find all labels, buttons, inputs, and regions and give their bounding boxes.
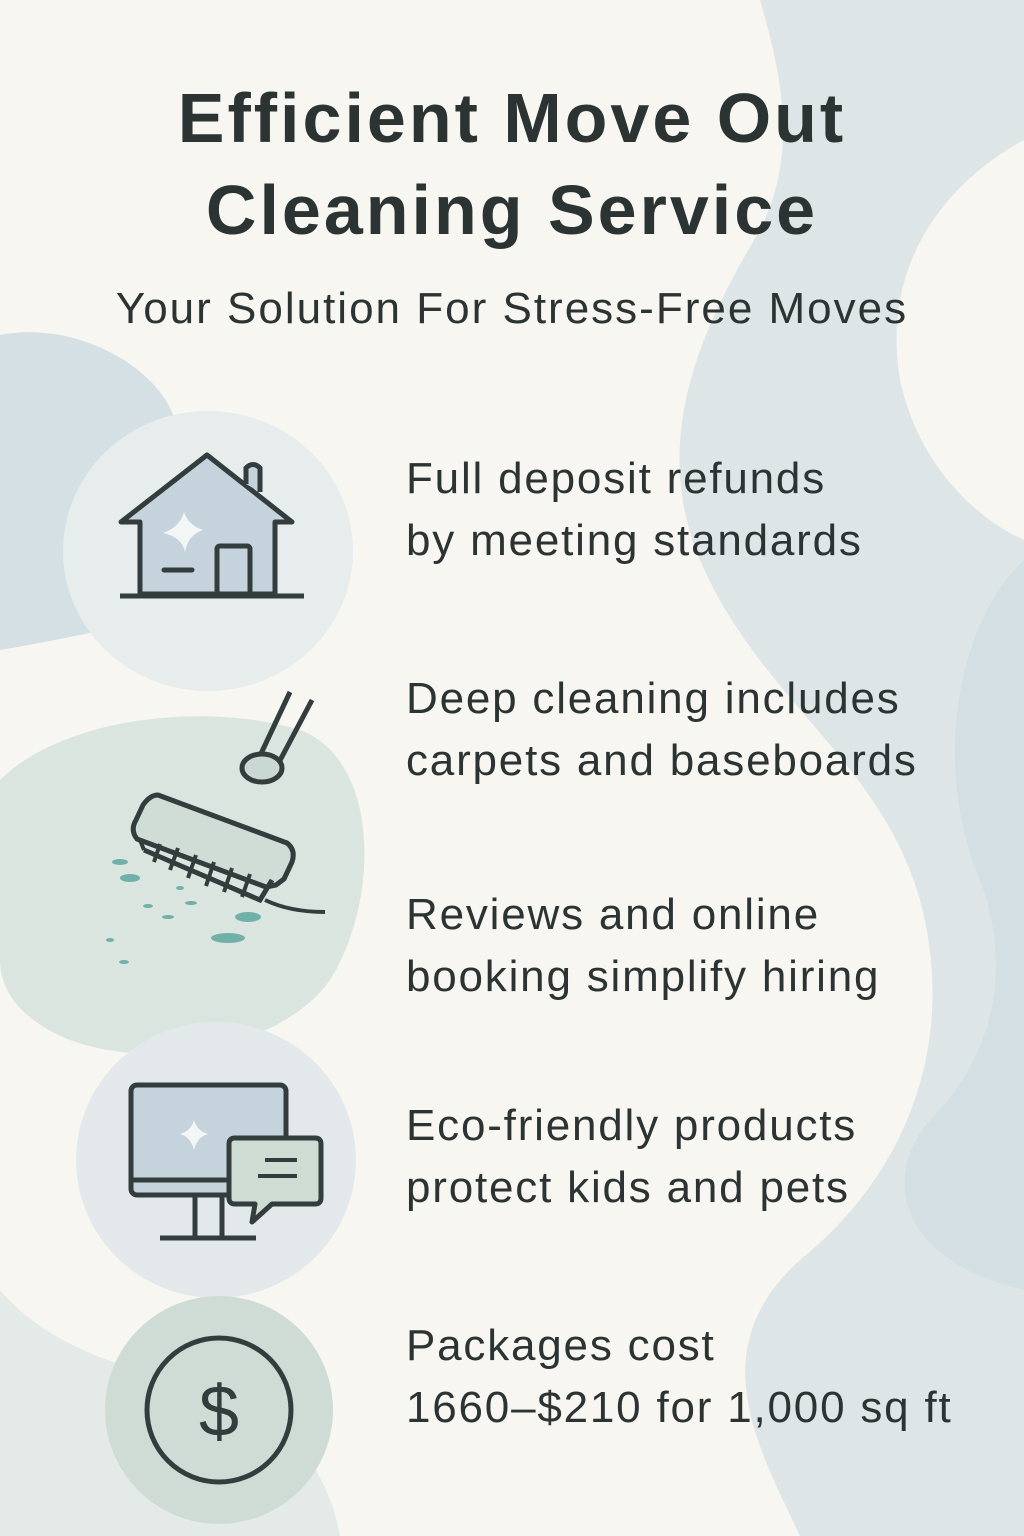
icon: house [63, 411, 353, 691]
text: deposit: by meeting standards [406, 516, 863, 565]
text: deposit [406, 454, 863, 565]
text: eco-friendly: Eco-friendly products [406, 1101, 857, 1150]
text: reviews: booking simplify hiring [406, 952, 880, 1001]
text: deep cleaning: Deep cleaning includes [406, 674, 901, 723]
subtitle: Your Solution For Stress-Free Moves [116, 284, 908, 333]
title: Efficient Move Out [178, 79, 846, 157]
text: packages: Packages cost [406, 1321, 716, 1370]
text: packages: 1660–$210 for 1,000 sq ft [406, 1383, 953, 1432]
text: packages [406, 1321, 953, 1432]
text: eco-friendly [406, 1101, 857, 1212]
icon: dollar [105, 1296, 333, 1524]
icon: broom [106, 690, 325, 964]
icon: dollar: $ [199, 1372, 239, 1452]
text: eco-friendly: protect kids and pets [406, 1163, 850, 1212]
text: reviews [406, 890, 880, 1001]
text: reviews: Reviews and online [406, 890, 820, 939]
title [178, 79, 846, 249]
text: deep cleaning: carpets and baseboards [406, 736, 918, 785]
icon: computer with chat [76, 1022, 356, 1297]
text: deep cleaning [406, 674, 918, 785]
text: deposit: Full deposit refunds [406, 454, 826, 503]
title: Cleaning Service [206, 171, 818, 249]
